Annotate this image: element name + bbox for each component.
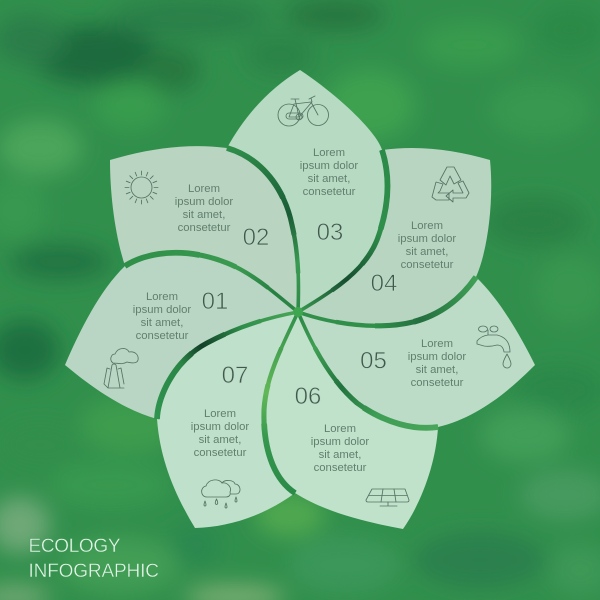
icon: rain cloud	[202, 480, 240, 508]
text: petal 04: Lorem	[411, 220, 443, 232]
petal 07: rain cloud	[157, 312, 298, 528]
number 03: 03	[317, 219, 343, 246]
icon: water tap with drop	[477, 326, 511, 368]
text: petal 02: ipsum dolor	[175, 196, 233, 208]
number 01: 01	[202, 288, 228, 315]
text: petal 01: Lorem	[146, 291, 178, 303]
petal 03: bicycle	[227, 70, 387, 312]
text: petal 03: ipsum dolor	[300, 160, 358, 172]
text: petal 04: sit amet,	[406, 246, 448, 258]
text: petal 04: ipsum dolor	[398, 233, 456, 245]
text: petal 03: Lorem	[313, 147, 345, 159]
petal divider curves	[125, 148, 476, 493]
number 04: 04	[371, 270, 397, 297]
text: petal 07: Lorem	[204, 408, 236, 420]
text: petal 05: sit amet,	[416, 364, 458, 376]
title: INFOGRAPHIC	[28, 561, 159, 582]
text: petal 06: consetetur	[314, 462, 367, 474]
icon: recycling arrows	[432, 167, 469, 202]
text: petal 05: ipsum dolor	[408, 351, 466, 363]
petal 01: factory smoke	[65, 253, 298, 419]
text: petal 01: ipsum dolor	[133, 304, 191, 316]
text: petal 05: consetetur	[411, 377, 464, 389]
icon: sun	[125, 171, 158, 204]
text: petal 07: sit amet,	[199, 434, 241, 446]
text: petal 06: Lorem	[324, 423, 356, 435]
text: petal 06: ipsum dolor	[311, 436, 369, 448]
text: petal 02: consetetur	[178, 222, 231, 234]
text: petal 04: consetetur	[401, 259, 454, 271]
icon: solar panel	[366, 489, 409, 506]
number 07: 07	[222, 362, 248, 389]
text: petal 07: consetetur	[194, 447, 247, 459]
text: petal 03: consetetur	[303, 186, 356, 198]
number 05: 05	[360, 348, 387, 374]
number 02: 02	[243, 224, 269, 251]
icon: factory chimney and smoke cloud	[104, 348, 138, 388]
petal 04: recycling	[298, 148, 491, 326]
petal 06: solar panel	[264, 312, 438, 529]
text: petal 03: sit amet,	[308, 173, 350, 185]
text: petal 06: sit amet,	[319, 449, 361, 461]
flower centre	[293, 307, 303, 317]
text: petal 01: consetetur	[136, 330, 189, 342]
text: petal 02: Lorem	[188, 183, 220, 195]
text: petal 01: sit amet,	[141, 317, 183, 329]
text: petal 02: sit amet,	[183, 209, 225, 221]
icon: bicycle	[278, 96, 328, 126]
petal 02: sun	[110, 146, 298, 312]
title: ECOLOGY	[28, 536, 121, 557]
text: petal 05: Lorem	[421, 338, 453, 350]
text: petal 07: ipsum dolor	[191, 421, 249, 433]
number 06: 06	[295, 383, 321, 410]
petal 05: water tap	[298, 277, 535, 428]
